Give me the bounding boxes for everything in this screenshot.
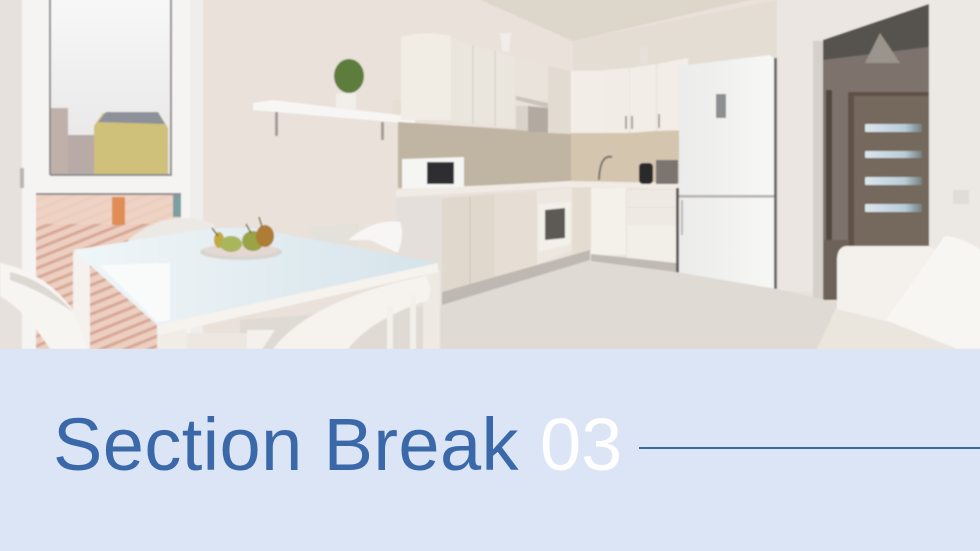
icon: sink tap, coffee machine and kettle — [599, 157, 678, 184]
floor — [240, 260, 838, 349]
back wall — [0, 0, 980, 355]
group: doorway with wooden door — [777, 0, 980, 300]
group: base cabinets and counter — [396, 181, 680, 305]
backsplash — [398, 122, 571, 188]
panel: section break band — [0, 349, 980, 551]
title: 03 — [540, 403, 622, 486]
ceiling — [470, 0, 770, 41]
group: window — [0, 0, 203, 349]
group: upper cabinets — [401, 33, 688, 134]
title: Section Break — [53, 403, 519, 486]
photo: bright white kitchen and dining area — [0, 0, 980, 349]
kitchen plinth — [442, 250, 676, 305]
group: dining table with chairs and fruit — [0, 217, 440, 349]
icon: microwave — [402, 157, 464, 189]
icon: white refrigerator — [679, 55, 777, 289]
group: white sofa — [817, 236, 980, 349]
right upper wall — [573, 0, 778, 70]
divider line — [639, 447, 980, 449]
group: wall shelf with plant — [253, 59, 415, 140]
